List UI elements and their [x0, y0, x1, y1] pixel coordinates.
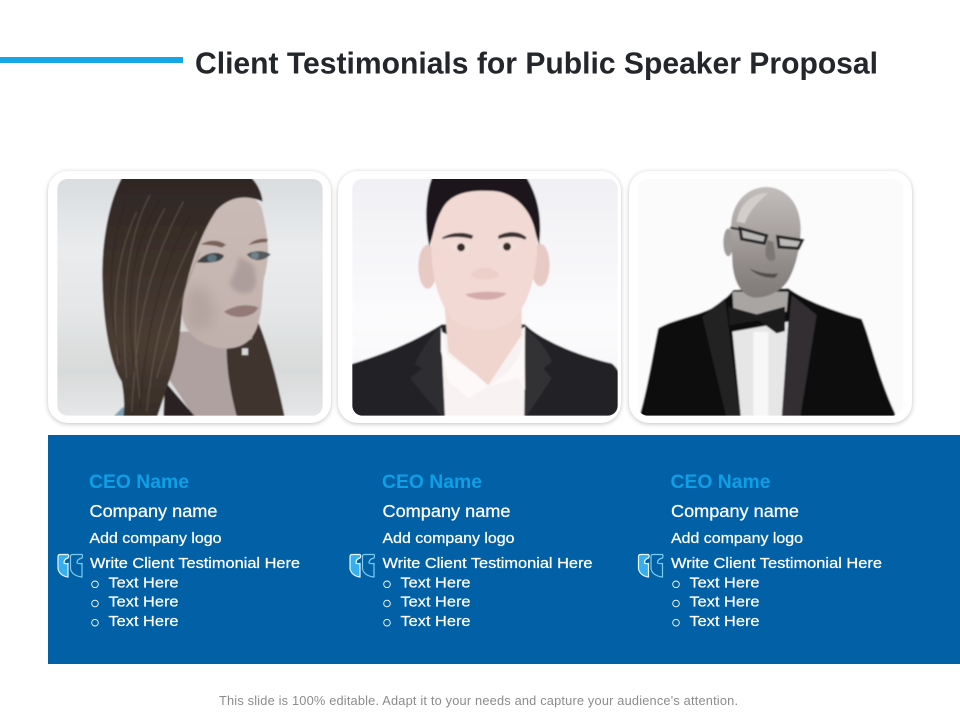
- card: portrait 3: [629, 171, 912, 423]
- title: Client Testimonials for Public Speaker Proposal: [195, 46, 878, 80]
- company name: Company name: [671, 501, 799, 521]
- bullet list: Text Here: [690, 574, 760, 592]
- company logo: Add company logo: [671, 531, 803, 547]
- company logo: Add company logo: [382, 531, 514, 547]
- bullet list: Text Here: [108, 613, 178, 630]
- photo: man in suit portrait: [352, 179, 618, 416]
- bullet list: Text Here: [400, 594, 470, 610]
- bullet list: Text Here: [690, 613, 760, 630]
- card: portrait 1: [48, 171, 331, 423]
- company logo: Add company logo: [90, 531, 222, 547]
- footer note: This slide is 100% editable. Adapt it to your needs and capture your audience's attention.: [219, 693, 738, 708]
- testimonial: Write Client Testimonial Here: [90, 555, 300, 572]
- column 1: [58, 472, 300, 630]
- bullet list: Text Here: [400, 574, 470, 592]
- bullet list: Text Here: [108, 594, 178, 610]
- bullet list: Text Here: [108, 574, 178, 592]
- bullet list: [673, 574, 760, 630]
- card: portrait 2: [338, 171, 621, 423]
- bullet list: [384, 574, 470, 630]
- bullet list: Text Here: [400, 613, 470, 630]
- column 2: [350, 472, 592, 630]
- company name: Company name: [90, 501, 218, 521]
- CEO name: CEO Name: [670, 472, 770, 493]
- CEO name: CEO Name: [382, 472, 482, 493]
- bullet list: Text Here: [690, 594, 760, 610]
- accent line: [0, 57, 183, 63]
- photo: bald man in tuxedo portrait: [640, 186, 896, 416]
- icon: quotation marks: [350, 554, 374, 577]
- company name: Company name: [382, 501, 510, 521]
- photo: woman portrait: [57, 179, 323, 416]
- column 3: [638, 472, 882, 630]
- icon: quotation marks: [638, 554, 663, 577]
- blue panel: [48, 435, 960, 664]
- bullet list: [92, 574, 178, 630]
- testimonial: Write Client Testimonial Here: [671, 555, 882, 572]
- icon: quotation marks: [58, 554, 82, 577]
- CEO name: CEO Name: [89, 472, 189, 493]
- testimonial: Write Client Testimonial Here: [382, 555, 592, 572]
